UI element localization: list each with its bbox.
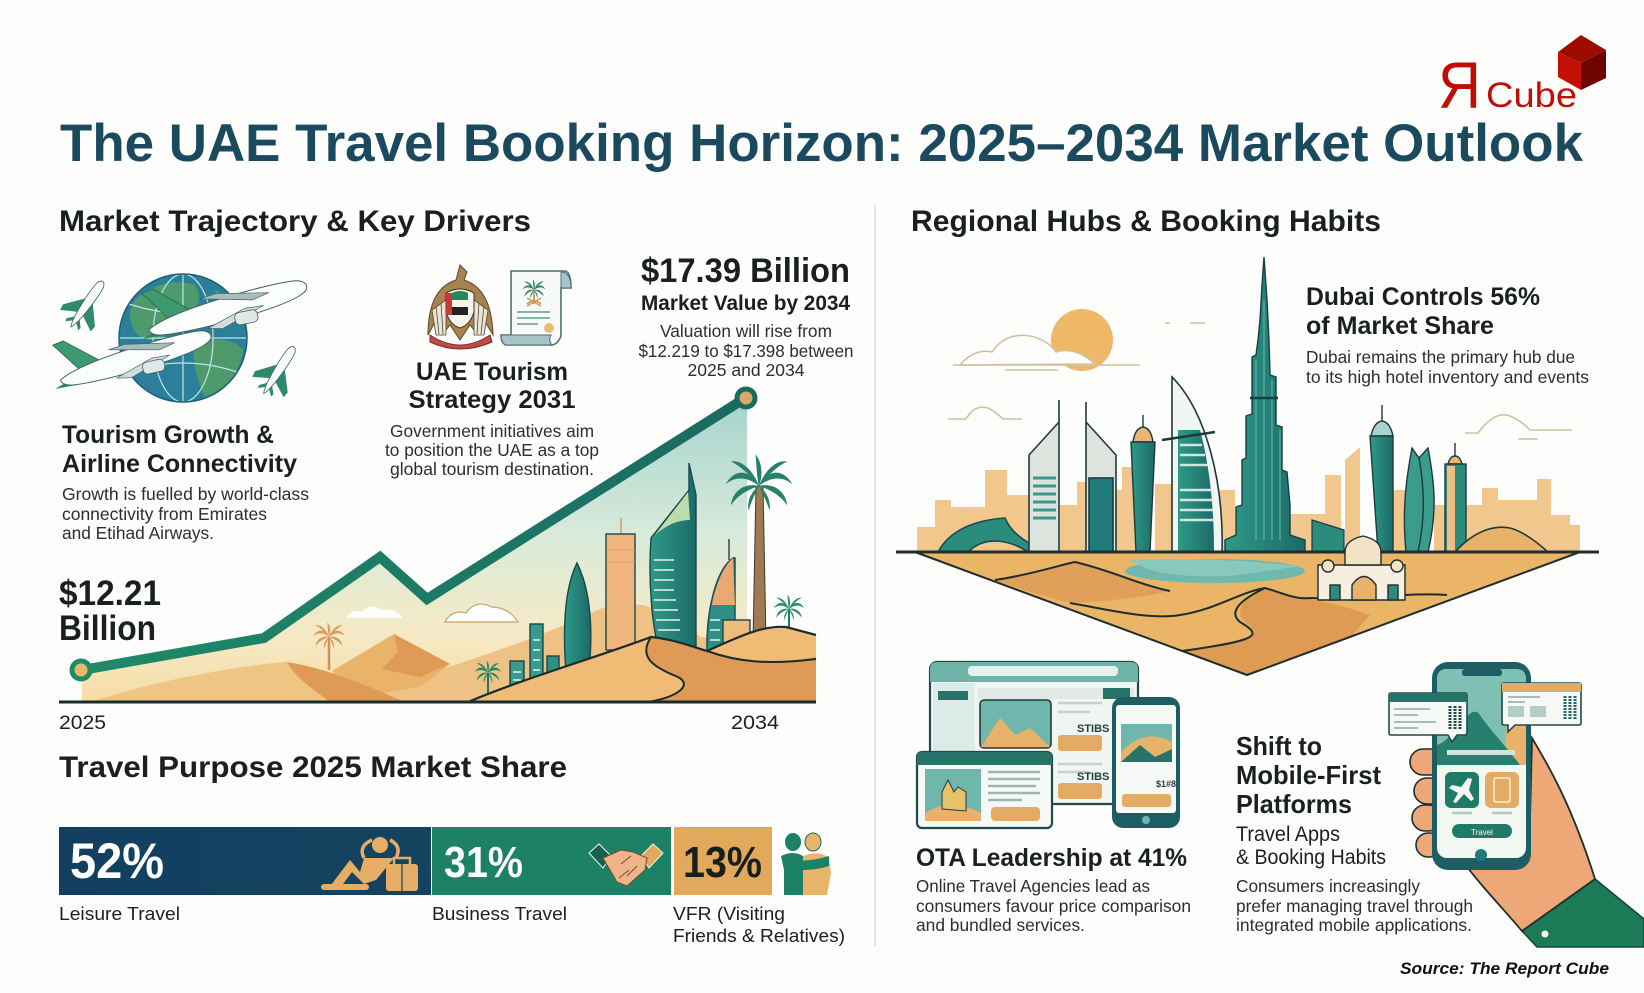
ticket right: [1502, 683, 1581, 732]
text: UAE tourism strategy: global tourism destination.: [390, 459, 594, 479]
panel: market trajectory and key drivers: [45, 205, 854, 734]
labels: travel purposes: VFR (Visiting: [673, 903, 785, 924]
landscape card: [980, 700, 1051, 748]
panel: regional hubs and booking habits: [896, 205, 1644, 947]
text: mobile-first platforms: & Booking Habits: [1236, 846, 1386, 869]
desktop browser: STIBS: [1077, 771, 1109, 783]
desktop browser: [930, 662, 1138, 804]
start marker: [72, 661, 90, 679]
mobile screen: $1#8: [1156, 779, 1176, 789]
text: OTA leadership: OTA Leadership at 41%: [916, 844, 1187, 872]
twin towers: [1029, 400, 1116, 552]
icon: strategy scroll: [501, 271, 571, 345]
text: Dubai market share: [1306, 283, 1589, 387]
callout: 2034 market value: $12.219 to $17.398 between: [638, 341, 854, 361]
text: UAE tourism strategy: to position the UAE as a top: [385, 440, 599, 460]
small right palm: [774, 595, 804, 629]
heading: regional hubs: Regional Hubs & Booking Habits: [911, 205, 1381, 238]
column divider: [874, 205, 876, 946]
Burj Khalifa: [1225, 257, 1305, 552]
mosque: [1318, 536, 1405, 600]
bar: VFR 13%: 13%: [683, 838, 762, 887]
text: mobile-first platforms: Platforms: [1236, 789, 1352, 819]
axis year labels: 2034: [731, 712, 779, 734]
sun: [1051, 309, 1113, 371]
phone screen: [1437, 669, 1526, 858]
logo: RCube: Cube: [1486, 76, 1577, 115]
clouds: [346, 606, 403, 618]
growth line: [82, 397, 747, 670]
bar: leisure 52%: [59, 827, 431, 895]
ticket left: [1389, 693, 1467, 742]
axis year labels: [59, 712, 779, 734]
text: mobile-first platforms: Mobile-First: [1236, 760, 1381, 790]
text: mobile-first platforms: Shift to: [1236, 731, 1322, 761]
fingers: [1410, 749, 1444, 857]
text: Dubai market share: to its high hotel inventory and events: [1306, 367, 1589, 387]
right palm trunk: [726, 454, 792, 642]
line chart: market growth with desert city: [59, 389, 816, 702]
phone button: [1452, 824, 1512, 838]
text: Dubai market share: Dubai remains the primary hub due: [1306, 347, 1575, 367]
text: mobile-first platforms: Consumers increasingly: [1236, 876, 1420, 896]
callout: 2034 market value: Valuation will rise from: [660, 321, 832, 341]
app icons: [1445, 772, 1479, 808]
callout: 2034 market value: Market Value by 2034: [641, 292, 850, 315]
logo: RCube: [1438, 35, 1606, 122]
text: UAE tourism strategy: Government initiatives aim: [390, 421, 594, 441]
icon: globe with planes: [45, 259, 312, 404]
label: starting value: [59, 574, 161, 648]
towers: [510, 463, 750, 691]
text: tourism growth: connectivity from Emirates: [62, 504, 267, 524]
callout: 2034 market value: $17.39 Billion: [641, 252, 850, 290]
text: tourism growth: Tourism Growth &: [62, 421, 274, 449]
callout: 2034 market value: [638, 252, 854, 380]
desktop browser: STIBS: [1077, 723, 1109, 735]
Burj Al Arab: [1162, 377, 1222, 552]
icon: two people: [781, 833, 831, 895]
text: tourism growth: Airline Connectivity: [62, 450, 297, 478]
labels: travel purposes: Friends & Relatives): [673, 925, 845, 946]
clouds: [948, 323, 1572, 439]
panel: travel purpose market share: [59, 751, 845, 946]
axis year labels: 2025: [59, 712, 106, 734]
text: OTA leadership: Online Travel Agencies lead as: [916, 876, 1150, 896]
text: mobile-first platforms: [1236, 731, 1473, 935]
illustration: hand holding phone: [1389, 662, 1644, 947]
text: mobile-first platforms: prefer managing travel through: [1236, 896, 1473, 916]
bar: leisure 52%: 52%: [70, 833, 164, 889]
labels: travel purposes: Business Travel: [432, 903, 567, 924]
low glass building: [1312, 520, 1344, 552]
desert triangle: [915, 552, 1580, 675]
icon: UAE emblem: [428, 265, 493, 349]
pyramid dune: [332, 634, 450, 697]
text: OTA leadership: [916, 844, 1191, 935]
horizon line: [896, 550, 1599, 554]
mobile screen: [1112, 697, 1180, 828]
phone button: Travel: [1471, 828, 1493, 837]
sleeve: [1522, 879, 1644, 947]
text: Dubai market share: of Market Share: [1306, 312, 1494, 340]
text: UAE tourism strategy: UAE Tourism: [416, 358, 568, 386]
distant dune: [330, 604, 816, 702]
text: tourism growth: and Etihad Airways.: [62, 523, 214, 543]
text: OTA leadership: and bundled services.: [916, 915, 1085, 935]
text: tourism growth: [62, 421, 309, 543]
label: starting value: Billion: [59, 609, 156, 648]
bar: business 31%: [432, 827, 671, 895]
green palm: [475, 660, 501, 695]
text: tourism growth: Growth is fuelled by world-class: [62, 484, 309, 504]
icon: lounger with suitcase: [321, 837, 418, 891]
illustration: OTA desktop and mobile screens: [917, 662, 1180, 828]
text: OTA leadership: consumers favour price comparison: [916, 896, 1191, 916]
chart area: [82, 397, 816, 702]
phone: [1432, 662, 1531, 870]
text: mobile-first platforms: Travel Apps: [1236, 823, 1340, 846]
outlined cloud: [445, 604, 518, 622]
heading: travel purpose: Travel Purpose 2025 Market Share: [59, 751, 567, 784]
left dune: [90, 662, 405, 702]
tower windows: [513, 560, 720, 680]
dome: [1455, 527, 1548, 552]
axis: [59, 700, 816, 704]
heading: market trajectory: Market Trajectory & Key Drivers: [59, 205, 531, 238]
text: mobile-first platforms: integrated mobile applications.: [1236, 915, 1472, 935]
logo: RCube: Я: [1438, 48, 1481, 122]
icon: handshake: [589, 844, 663, 886]
illustration: Dubai skyline: [896, 257, 1599, 675]
slim tower: [1445, 443, 1466, 552]
backdrop buildings: [917, 447, 1580, 552]
source note: Source: The Report Cube: [1400, 959, 1609, 978]
twisted tower: [1131, 415, 1155, 552]
small browser: [917, 752, 1052, 828]
foreground dune: [468, 627, 816, 702]
labels: travel purposes: Leisure Travel: [59, 903, 180, 924]
labels: travel purposes: [59, 903, 845, 946]
callout: 2034 market value: 2025 and 2034: [688, 360, 805, 380]
arch bridge: [938, 518, 1048, 552]
text: UAE tourism strategy: Strategy 2031: [408, 386, 576, 414]
title: The UAE Travel Booking Horizon: 2025–2034 Market Outlook: [60, 114, 1584, 173]
teal right tower: [1370, 405, 1393, 552]
desert palm: [313, 622, 345, 670]
hand: [1462, 738, 1595, 931]
end marker: [737, 389, 755, 407]
bar: business 31%: 31%: [444, 838, 523, 887]
label: starting value: $12.21: [59, 574, 161, 613]
text: UAE tourism strategy: [385, 358, 599, 479]
phone hero: [1437, 669, 1526, 765]
twisted pair: [1404, 448, 1434, 552]
bar: VFR 13%: [674, 827, 831, 895]
text: Dubai market share: Dubai Controls 56%: [1306, 283, 1540, 311]
